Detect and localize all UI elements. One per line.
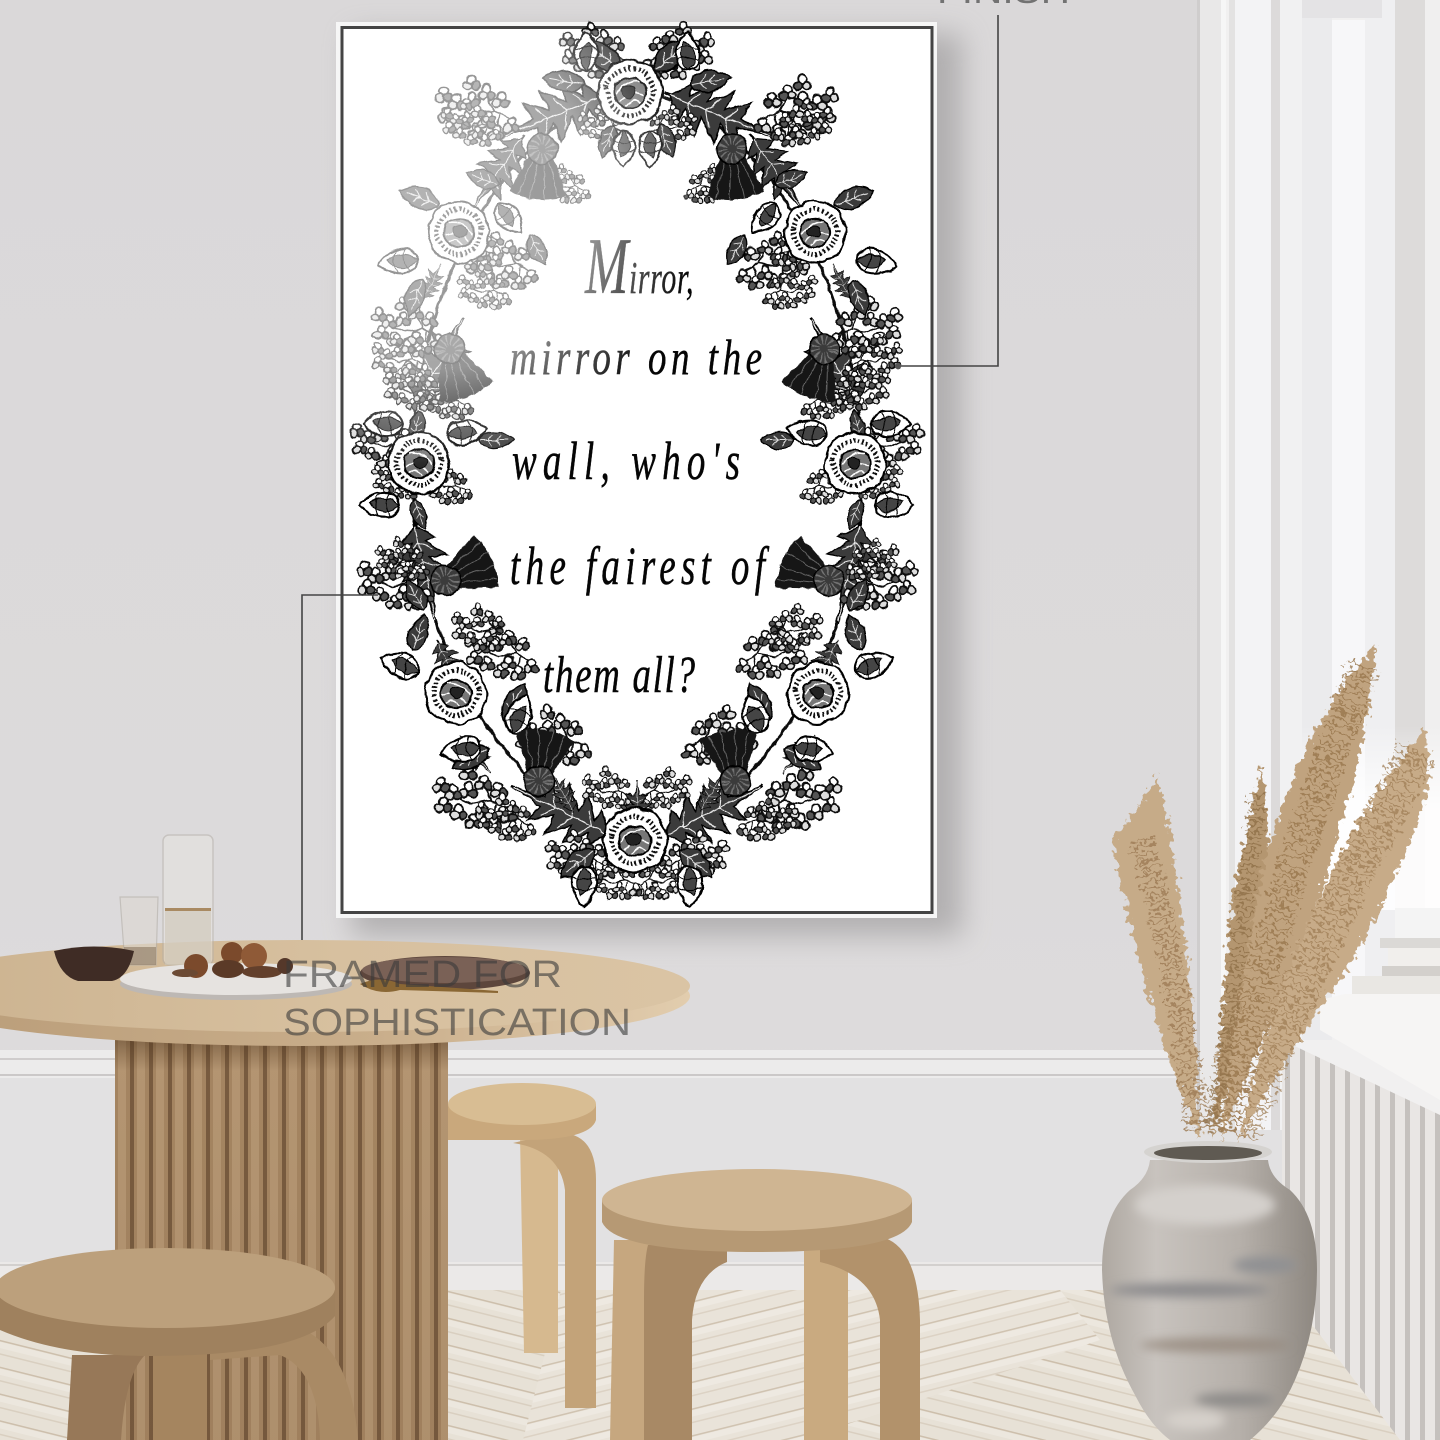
ceramic vase [1102,1141,1317,1440]
stool seat [448,1104,596,1140]
books on window sill [1352,908,1440,994]
callout line: framed [302,595,378,945]
dark bowl [54,946,134,981]
callout line: finish [895,15,998,369]
white frame [336,22,937,918]
pampas plume middle [1212,765,1268,1142]
quote line 1: Mirror, [584,222,694,311]
radiator [1282,1040,1440,1440]
quote line 2: mirror on the [510,330,762,385]
stool legs [520,1135,558,1353]
pampas plume right [1238,730,1429,1145]
quote line 3: wall, who's [512,431,740,491]
stool legs [67,1355,145,1440]
wreath: left half [350,22,641,906]
floral wreath [350,22,924,906]
vase mottling [1110,1185,1297,1430]
nuts on plate [172,942,293,978]
label line 1: FRAMED FOR [283,954,562,996]
lower wall panel [0,1076,1300,1266]
marble plate [120,963,352,1000]
wooden floor [0,1290,1440,1440]
pampas plume left [1112,775,1200,1142]
vase opening [1144,1141,1272,1163]
quote line 4: the fairest of [510,536,770,596]
dining table top [0,940,690,1046]
stool seat [0,1290,335,1356]
gradient fade over artwork [345,31,929,531]
stool left [0,1248,358,1440]
glass carafe [163,835,213,965]
window sill [1320,994,1440,1100]
stool behind table [448,1083,596,1408]
handwritten quote [510,222,770,704]
wooden tray and spoon [360,956,530,993]
table base [115,1030,448,1440]
drinking glass [120,897,158,965]
skirting board [0,1262,1300,1292]
stool right [602,1169,920,1440]
wreath: right half [633,22,924,906]
chair rail moulding [0,1050,1180,1078]
wreath: centre foliage [598,59,668,873]
pampas grass [1112,645,1429,1145]
frame shadow [352,34,962,936]
inner print with black border [342,28,932,912]
label line 2: SOPHISTICATION [283,1002,631,1044]
stool seat [602,1200,912,1252]
callout label: framed for sophistication [283,954,631,1044]
quote line 5: them all? [543,646,695,704]
framed print [336,22,962,936]
pampas plume tall [1220,645,1376,1142]
window frame and trim [1197,0,1440,1130]
stool legs [610,1240,654,1440]
